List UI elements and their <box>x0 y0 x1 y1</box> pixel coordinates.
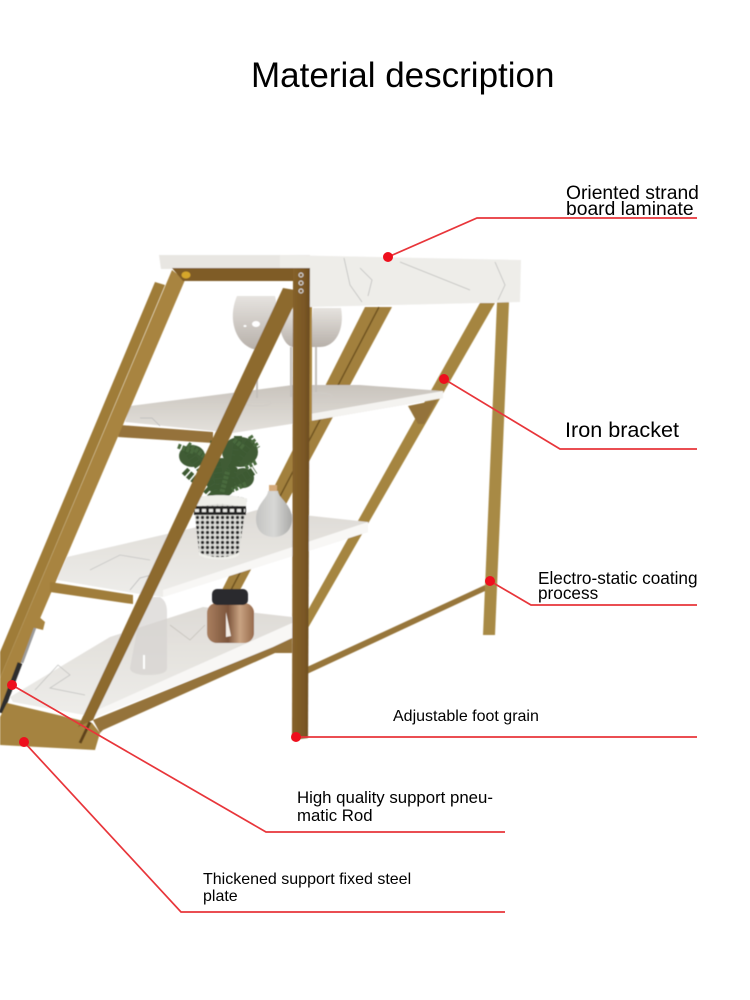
back diagonal rails <box>222 307 392 590</box>
lower stretcher bar <box>307 585 485 674</box>
copper jar with black lid <box>207 589 254 643</box>
marble table top <box>159 255 521 307</box>
furniture illustration <box>0 255 521 750</box>
callout: iron bracket <box>439 374 697 449</box>
glass bowls <box>233 296 342 350</box>
lower shelf support <box>93 638 292 733</box>
middle shelf <box>57 510 368 597</box>
glass stems and bases <box>245 347 332 406</box>
callout: pneumatic rod: High quality support pneu- <box>297 788 493 807</box>
main side frame rail <box>0 270 185 712</box>
callout: electro-static coating process: Electro-static coating <box>538 568 698 588</box>
gas strut pneumatic rod <box>1 615 45 713</box>
title: Material description <box>251 56 554 95</box>
front vertical post <box>292 268 312 740</box>
callout: electro-static coating process: process <box>538 583 598 603</box>
upper shelf support arm <box>118 425 213 443</box>
callout: steel plate: Thickened support fixed steel <box>203 871 411 888</box>
callout: electro-static coating process <box>485 568 698 605</box>
callout: steel plate: plate <box>203 888 238 905</box>
thickened steel base plate <box>0 703 100 750</box>
patterned plant pot <box>193 495 247 560</box>
upper shelf <box>125 385 443 433</box>
outer rear frame rail <box>0 282 165 678</box>
callout: steel plate <box>19 737 505 912</box>
callout: pneumatic rod <box>7 680 505 832</box>
top frame bar <box>172 268 295 281</box>
callout: oriented strand board laminate: Oriented strand <box>566 183 699 204</box>
brass hinge bolt <box>182 272 190 278</box>
right shelf bracket <box>408 400 437 424</box>
middle support arm <box>50 582 133 604</box>
callout: adjustable foot grain: Adjustable foot grain <box>393 708 539 725</box>
right diagonal brace <box>308 303 495 628</box>
callout: oriented strand board laminate: board laminate <box>566 199 694 220</box>
callout: adjustable foot grain <box>291 708 697 742</box>
callout: oriented strand board laminate <box>383 183 699 262</box>
front diagonal frame <box>78 288 295 727</box>
callout: iron bracket: Iron bracket <box>565 417 679 442</box>
ceramic vase <box>256 485 292 537</box>
callout: pneumatic rod: matic Rod <box>297 806 373 825</box>
plant <box>178 436 258 500</box>
bottom shelf <box>10 607 292 717</box>
base plate slot <box>80 722 90 743</box>
right rear leg <box>483 302 509 635</box>
glass bottle <box>130 597 167 675</box>
